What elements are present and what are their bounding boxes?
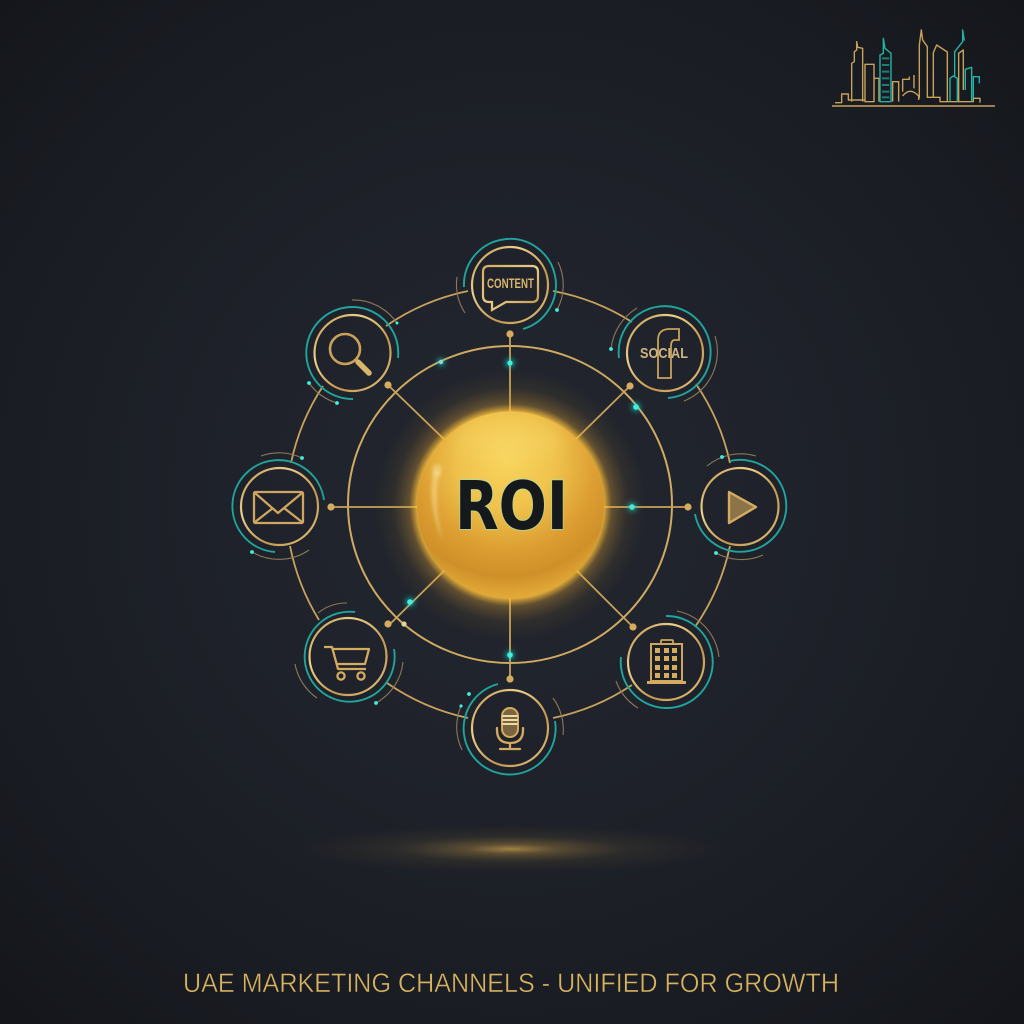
outer ring connectors (290, 291, 730, 718)
skyline gold outlines (835, 30, 980, 103)
footer title: UAE MARKETING CHANNELS - UNIFIED FOR GROWTH (183, 968, 839, 998)
channel: commerce (295, 603, 403, 705)
channel: email (232, 453, 324, 559)
glowing cyan nodes (401, 358, 640, 659)
inner orbit ring (348, 346, 672, 663)
icon: play triangle (729, 492, 756, 523)
channel: content (457, 239, 563, 329)
icon: microphone (497, 708, 523, 749)
icon: magnifier (330, 334, 369, 373)
icon: envelope (254, 492, 303, 523)
ROI label: ROI (455, 467, 568, 545)
channel: podcast (457, 684, 563, 775)
icon: office building (647, 640, 686, 684)
icon: shopping cart (324, 647, 369, 680)
central ROI hub (376, 370, 646, 640)
city skyline logo (832, 30, 995, 106)
channel: search (306, 300, 398, 405)
floor glow (296, 825, 726, 873)
channel: social (609, 306, 717, 401)
icon: speech bubble: CONTENT (487, 275, 534, 291)
channel: video (695, 454, 786, 560)
skyline teal outlines (880, 30, 979, 102)
channel: real estate (616, 611, 719, 708)
spokes to the hub (327, 330, 692, 683)
icon: social f: SOCIAL (640, 345, 688, 362)
